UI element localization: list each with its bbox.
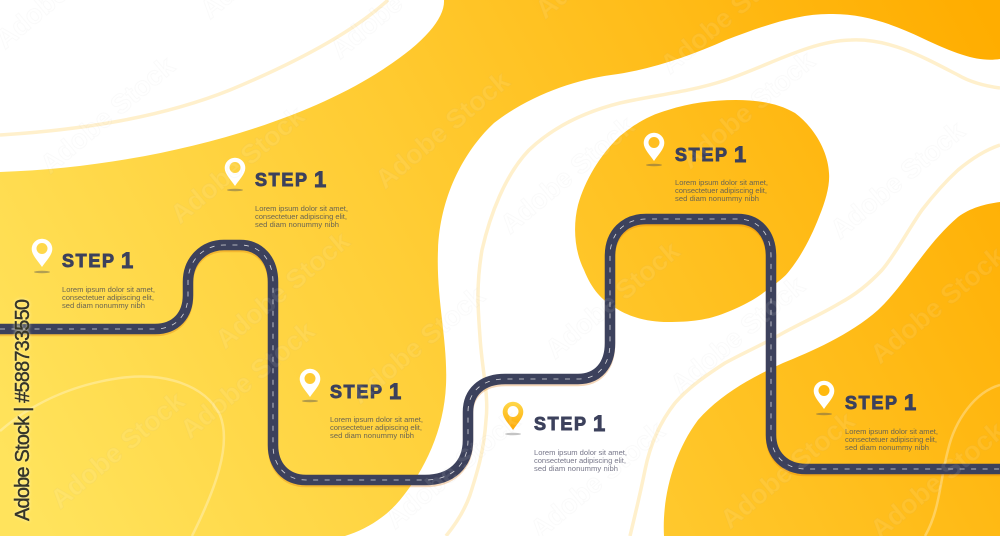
text block: step three: Lorem ipsum dolor sit amet, bbox=[330, 415, 423, 424]
text block: step two: Lorem ipsum dolor sit amet, bbox=[255, 204, 348, 213]
icon: map pin two bbox=[225, 158, 245, 191]
icon: map pin four bbox=[503, 402, 523, 435]
stock watermarks: Adobe Stock bbox=[715, 405, 861, 535]
stock watermarks: Adobe Stock bbox=[210, 225, 356, 355]
cream line: top left bbox=[0, 0, 388, 135]
heading: step two: 1 bbox=[314, 167, 326, 192]
text block: step two: sed diam nonummy nibh bbox=[255, 220, 339, 229]
heading: step four: 1 bbox=[593, 411, 605, 436]
stock watermarks: Adobe Stock bbox=[540, 235, 686, 365]
text block: step two: consectetuer adipiscing elit, bbox=[255, 212, 347, 221]
stock watermarks: Adobe Stock bbox=[345, 280, 491, 410]
heading: step six: STEP bbox=[845, 393, 897, 413]
stock watermarks: Adobe Stock bbox=[45, 385, 191, 515]
heading: step four: STEP bbox=[534, 414, 586, 434]
icon: map pin five bbox=[644, 133, 664, 166]
stock watermarks: Adobe Stock bbox=[175, 315, 321, 445]
text block: step four: Lorem ipsum dolor sit amet, bbox=[534, 448, 627, 457]
text block: step one: consectetuer adipiscing elit, bbox=[62, 293, 154, 302]
text block: step five: consectetuer adipiscing elit, bbox=[675, 186, 767, 195]
stock watermarks: Adobe Stock bbox=[665, 270, 811, 400]
cream line: lower ribbon bbox=[630, 145, 1000, 536]
step two group bbox=[225, 158, 348, 229]
heading: step one: 1 bbox=[121, 248, 133, 273]
icon: map pin three bbox=[300, 369, 320, 402]
icon: map pin one bbox=[32, 239, 52, 273]
text block: step five: sed diam nonummy nibh bbox=[675, 194, 759, 203]
text block: step three: sed diam nonummy nibh bbox=[330, 431, 414, 440]
cream line: upper ribbon bbox=[446, 40, 1000, 536]
heading: step three: STEP bbox=[330, 382, 382, 402]
stock watermarks: Adobe Stock bbox=[165, 100, 311, 230]
heading: step five: STEP bbox=[675, 145, 727, 165]
icon: map pin six bbox=[814, 381, 834, 415]
faint line: bottom left bbox=[0, 377, 224, 536]
stock watermarks: Adobe Stock bbox=[370, 65, 516, 195]
text block: step six: consectetuer adipiscing elit, bbox=[845, 435, 937, 444]
faint line: bottom right bbox=[925, 385, 1000, 536]
vertical stock id text: Adobe Stock | #588733550 bbox=[12, 299, 34, 521]
text block: step four: consectetuer adipiscing elit, bbox=[534, 456, 626, 465]
text block: step six: Lorem ipsum dolor sit amet, bbox=[845, 427, 938, 436]
stock watermarks: Adobe Stock bbox=[380, 405, 526, 535]
heading: step one: STEP bbox=[62, 251, 114, 271]
stock watermarks: Adobe Stock bbox=[495, 110, 641, 240]
text block: step five: Lorem ipsum dolor sit amet, bbox=[675, 178, 768, 187]
heading: step six: 1 bbox=[904, 390, 916, 415]
step three group bbox=[300, 369, 423, 440]
stock watermarks: Adobe Stock bbox=[35, 50, 181, 180]
text block: step six: sed diam nonummy nibh bbox=[845, 443, 929, 452]
text block: step one: Lorem ipsum dolor sit amet, bbox=[62, 285, 155, 294]
white ribbon shape bbox=[345, 14, 1000, 536]
road bbox=[0, 219, 1000, 482]
step one group bbox=[32, 239, 155, 310]
text block: step one: sed diam nonummy nibh bbox=[62, 301, 145, 310]
stock watermarks: Adobe Stock bbox=[675, 45, 821, 175]
step four group bbox=[503, 402, 627, 473]
stock watermarks: Adobe Stock bbox=[825, 115, 971, 245]
heading: step two: STEP bbox=[255, 170, 307, 190]
step five group bbox=[644, 133, 768, 203]
white shape: top left bbox=[0, 0, 444, 172]
text block: step three: consectetuer adipiscing elit, bbox=[330, 423, 422, 432]
heading: step three: 1 bbox=[389, 379, 401, 404]
heading: step five: 1 bbox=[734, 142, 746, 167]
text block: step four: sed diam nonummy nibh bbox=[534, 464, 618, 473]
blob behind step five bbox=[575, 100, 829, 322]
step six group bbox=[814, 381, 938, 452]
